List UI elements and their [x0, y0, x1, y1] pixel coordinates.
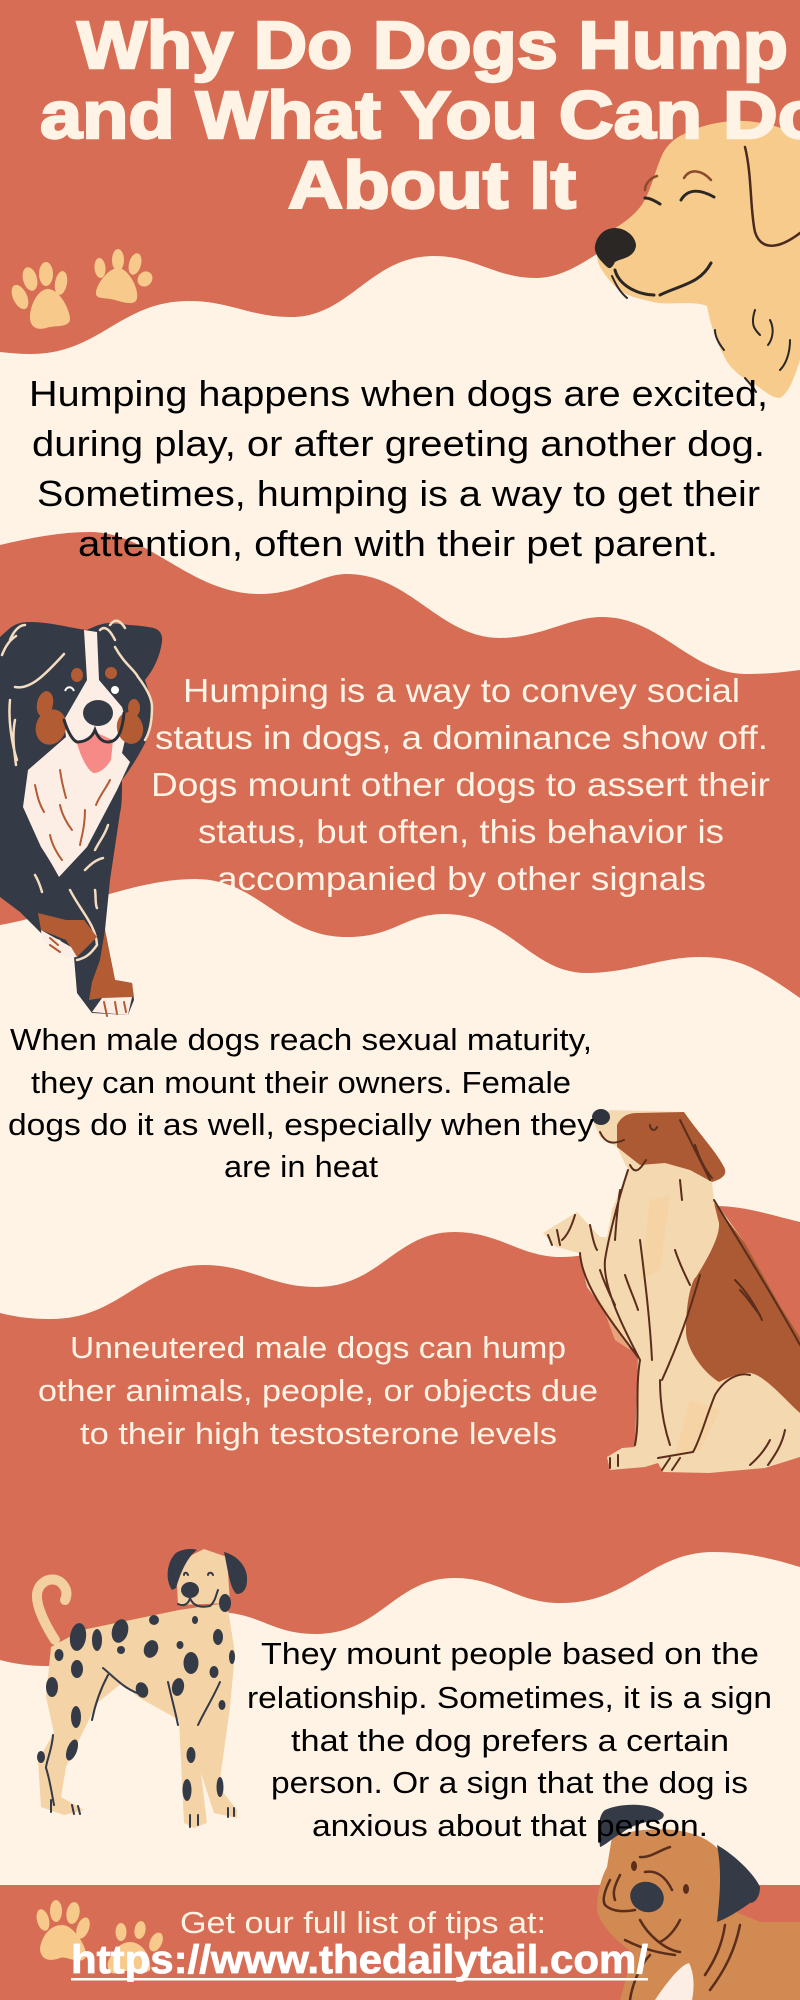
icon: Bernese dog — [0, 621, 162, 1016]
text block: relationship: that the dog prefers a certain — [291, 1723, 729, 1758]
text block: sexual maturity: When male dogs reach sexual maturity, — [10, 1022, 592, 1057]
footer link: https://www.thedailytail.com/ — [71, 1938, 648, 1982]
text block: intro: during play, or after greeting another dog. — [32, 423, 765, 464]
panel: footer band — [0, 1885, 800, 2000]
text block: social status: status, but often, this behavior is — [198, 814, 724, 851]
icon: golden dog head — [595, 121, 800, 398]
icon: footer paw print right — [108, 1920, 166, 1974]
text block: relationship: relationship. Sometimes, it is a sign — [247, 1680, 772, 1715]
text block: intro: Humping happens when dogs are excited, — [29, 373, 768, 414]
icon: sitting brown and cream dog — [543, 1109, 800, 1473]
text block: sexual maturity: they can mount their owners. Female — [31, 1065, 571, 1100]
text block: social status: accompanied by other signals — [217, 861, 706, 898]
title: About It — [288, 148, 576, 223]
panel: middle coral wave — [0, 532, 800, 998]
text block: intro: attention, often with their pet parent. — [78, 523, 718, 564]
text block: unneutered dogs — [38, 1330, 598, 1451]
text block: unneutered dogs: Unneutered male dogs can hump — [70, 1330, 566, 1365]
icon: footer paw print left — [34, 1900, 92, 1961]
text block: relationship — [247, 1636, 772, 1843]
text block: relationship: person. Or a sign that the dog is — [271, 1765, 748, 1800]
icon: paw print left — [8, 262, 70, 329]
icon: dalmatian dog — [37, 1549, 247, 1828]
text block: social status: Humping is a way to convey social — [183, 673, 740, 710]
text block: unneutered dogs: other animals, people, or objects due — [38, 1373, 598, 1408]
panel: top coral wave — [0, 0, 800, 354]
text block: sexual maturity: dogs do it as well, especially when they — [8, 1107, 595, 1142]
text block: intro — [29, 373, 768, 564]
footer text: Get our full list of tips at: — [180, 1905, 546, 1940]
text block: unneutered dogs: to their high testosterone levels — [80, 1416, 557, 1451]
icon: paw print right — [94, 249, 156, 303]
text block: social status: status in dogs, a dominance show off. — [155, 720, 768, 757]
text block: relationship: anxious about that person. — [312, 1808, 708, 1843]
icon: boxer dog — [597, 1805, 800, 2000]
title: Why Do Dogs Hump — [77, 8, 788, 83]
text block: sexual maturity: are in heat — [224, 1149, 378, 1184]
text block: sexual maturity — [8, 1022, 595, 1184]
title: and What You Can Do — [40, 78, 800, 153]
panel: lower coral wave — [0, 1206, 800, 1666]
text block: intro: Sometimes, humping is a way to get their — [37, 473, 760, 514]
text block: social status — [151, 673, 770, 898]
text block: social status: Dogs mount other dogs to assert their — [151, 767, 770, 804]
title — [40, 8, 800, 223]
text block: relationship: They mount people based on the — [261, 1636, 759, 1671]
